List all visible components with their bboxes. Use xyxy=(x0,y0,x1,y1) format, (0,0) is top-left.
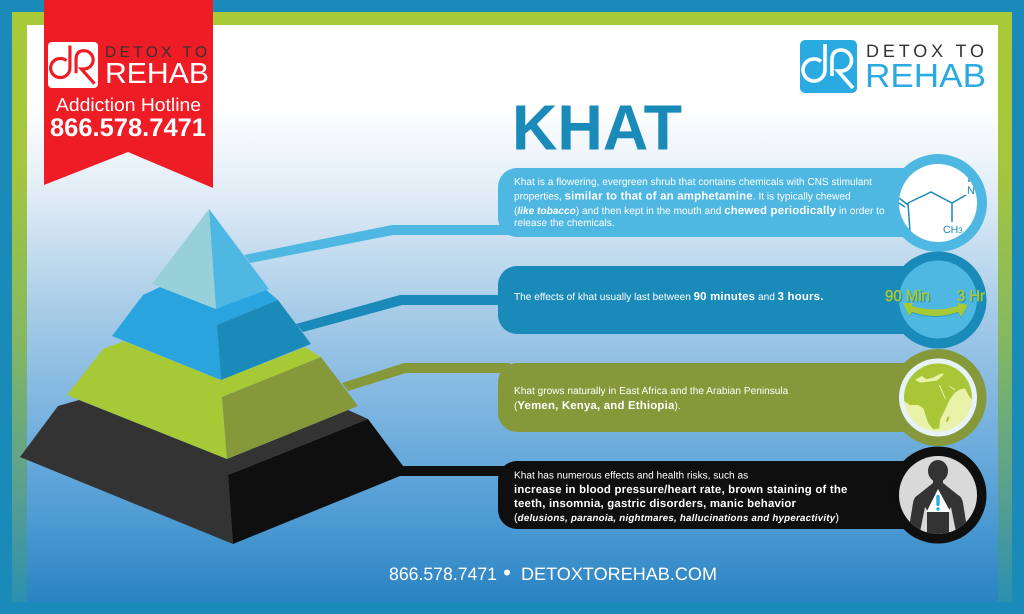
icon: time span: 3 Hr xyxy=(958,289,986,306)
text: description: similar to that of an amphetamine. It is typically chewed xyxy=(565,190,851,202)
tier 3 xyxy=(67,341,358,459)
panel: duration xyxy=(498,252,986,348)
connector: tier 4 xyxy=(400,466,510,476)
logo: top right: DETOX TO xyxy=(866,41,984,61)
icon: molecule: CH3 xyxy=(943,224,963,236)
footer contact line: DETOXTOREHAB.COM xyxy=(521,564,717,584)
icon: time span: 3 Hr xyxy=(957,288,985,305)
text: risks: teeth, insomnia, gastric disorders, manic behavior xyxy=(514,498,797,510)
icon: molecule: N xyxy=(967,185,975,197)
panel: what khat is xyxy=(498,154,987,252)
logo: banner: DETOX TO xyxy=(105,44,207,61)
text: geography: Khat grows naturally in East Africa and the Arabian Peninsula xyxy=(514,386,789,397)
icon: time span xyxy=(885,260,986,338)
logo: top right xyxy=(800,40,986,95)
connector: tier 2 xyxy=(296,295,510,332)
text: description: properties, xyxy=(514,192,565,202)
logo: banner xyxy=(48,42,209,90)
text: risks: Khat has numerous effects and health risks, such as xyxy=(514,470,748,482)
text: geography: ( xyxy=(514,401,518,412)
connector: tier 3 xyxy=(342,363,510,391)
banner xyxy=(44,0,213,188)
icon: molecule xyxy=(899,164,977,242)
icon: time span: 90 Min xyxy=(885,288,930,305)
connector: tier 1 xyxy=(244,225,510,263)
text: geography: Yemen, Kenya, and Ethiopia). xyxy=(517,400,681,412)
text: risks: increase in blood pressure/heart rate, brown staining of the xyxy=(514,484,848,496)
icon: globe xyxy=(899,357,977,436)
panel: where it grows xyxy=(498,349,986,446)
logo: banner: REHAB xyxy=(105,58,209,90)
text: description: Khat is a flowering, evergreen shrub that contains chemicals with CNS stimulant xyxy=(514,177,872,188)
logo: top right: REHAB xyxy=(865,58,986,95)
hotline label: Addiction Hotline xyxy=(56,94,201,115)
text: description: release the chemicals. xyxy=(514,218,615,229)
pyramid xyxy=(20,209,403,544)
text: description: like tobacco) and then kept in the mouth and chewed periodically in order to xyxy=(517,205,885,217)
tier 4 xyxy=(20,400,403,544)
text: description: ( xyxy=(514,206,518,217)
text: risks: ( xyxy=(514,512,518,524)
tier 2 xyxy=(112,287,311,380)
footer contact line xyxy=(389,564,717,584)
tier 1 xyxy=(152,209,269,309)
panel: health risks xyxy=(498,446,986,544)
text: duration: The effects of khat usually last between 90 minutes and 3 hours. xyxy=(514,291,824,303)
footer contact line: 866.578.7471 xyxy=(389,564,497,584)
icon: time span: 90 Min xyxy=(886,289,931,306)
icon: person with warning xyxy=(899,456,977,534)
title: KHAT xyxy=(512,92,682,164)
text: risks: delusions, paranoia, nightmares, hallucinations and hyperactivity) xyxy=(518,512,839,524)
hotline number: 866.578.7471 xyxy=(50,114,206,142)
